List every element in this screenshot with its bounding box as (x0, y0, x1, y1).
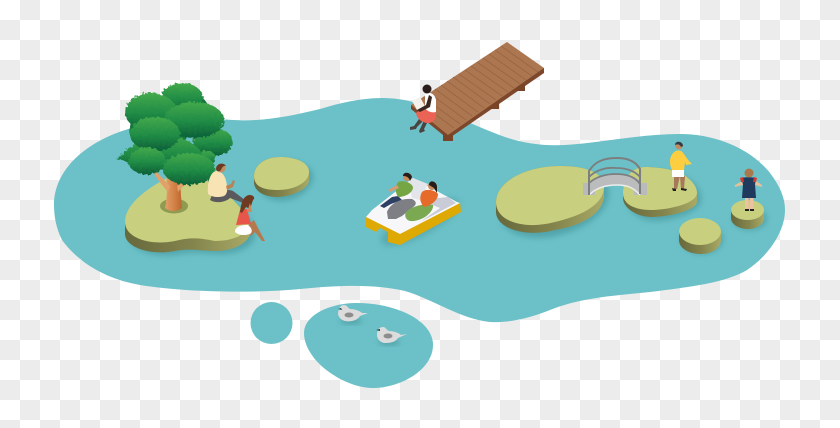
tree (116, 83, 233, 214)
pedal boat (366, 173, 465, 255)
person in yellow shirt (670, 142, 692, 191)
small round pond (250, 302, 292, 344)
lake (54, 98, 785, 322)
duck pond (304, 303, 433, 388)
island: small oval near tree (254, 157, 313, 201)
island: tiny stepping stone (731, 200, 767, 230)
island: tree island (125, 176, 255, 255)
man sitting on island (208, 164, 245, 203)
person in orange shirt (405, 181, 438, 221)
person in green shirt (380, 173, 413, 208)
island: large right island (496, 166, 609, 238)
duck one (338, 305, 368, 324)
dock piers (443, 84, 525, 141)
person reading on dock (410, 84, 436, 133)
bridge (583, 158, 647, 195)
dock (411, 42, 544, 141)
woman sitting on island edge (235, 195, 265, 241)
girl in blue dress (735, 168, 762, 211)
island: bridge-side island (623, 167, 701, 221)
island: small stepping stone (679, 218, 723, 254)
duck two (376, 327, 407, 345)
